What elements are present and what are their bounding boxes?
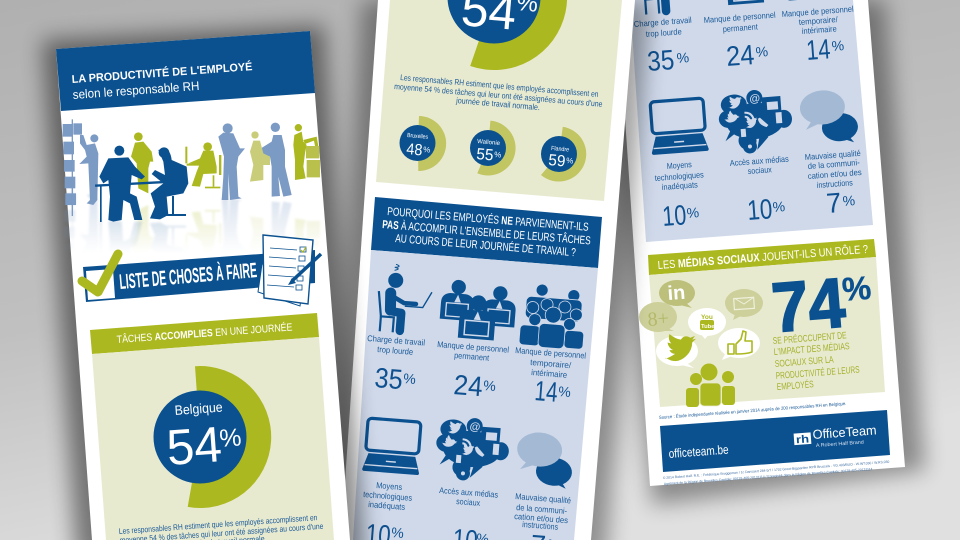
reason percentages: % [686,204,700,221]
heading: why employees cannot finish: AU COURS DE LEUR JOURNÉE DE TRAVAIL ? [395,232,576,259]
panel: reasons [353,250,598,540]
reason labels: intérimaire [801,23,837,36]
reason labels [363,333,587,532]
icon: checklist paper and pen [258,235,321,306]
reason percentages: % [558,383,571,400]
reason labels: sociaux [747,164,773,176]
reason labels: inadéquats [661,179,698,192]
reason percentages: 35 [374,362,404,395]
reason labels: Manque de personnel [437,339,510,355]
chart: Belgium donut 54% [154,366,271,508]
text: 74% description: EMPLOYÉS [776,379,814,393]
text: 74% description: SE PRÉOCCUPENT DE [772,330,847,347]
reason labels: Manque de personnel [703,10,776,25]
reason percentages: % [483,377,496,394]
reason percentages: % [772,198,786,215]
header banner: title [56,31,315,111]
chart: Flandre 59% [541,127,586,182]
icon: YouTube bubble [688,308,726,339]
icon: social media cloud [717,87,794,156]
floor reflection [64,188,320,246]
reason labels: de la communi- [516,502,568,516]
text: description [119,513,324,540]
heading: why employees cannot finish [371,197,602,268]
reason percentages: 10 [746,193,773,226]
reason labels: Moyens [376,480,403,492]
icon: speech bubbles [799,88,859,146]
icon: laptop [362,418,423,475]
heading: tasks completed in a day [90,313,319,354]
reason percentages: % [403,370,416,387]
icon: Google plus bubble [639,302,677,332]
reason percentages: % [842,192,856,209]
reason labels: cation et/ou des [807,167,862,181]
reason labels: instructions [816,177,853,190]
reason labels: sociaux [456,496,481,508]
icon: people group [686,364,735,407]
icon: workload [637,0,695,15]
reason labels: temporaire/ [798,14,839,27]
legal fine print: Agrément de la Région de Bruxelles-Capitale: 00128-406-20131114 / Enregistré dans la Région de Bruxelles-Capitale: 00128-405-20131114 [664,467,873,486]
reason percentages [365,362,571,540]
icon: temporary staff [782,0,850,2]
icon: like bubble [718,328,760,360]
text: description: moyenne 54 % des tâches qui leur ont été assignées au cours d'une [394,82,603,109]
reason labels: inadéquats [368,499,406,512]
text: 74% description: PRODUCTIVITÉ DE LEURS [775,365,860,382]
reason percentages: 14 [534,375,559,408]
icon: Twitter bubble [656,334,698,368]
icon: mail bubble [725,289,763,320]
reason labels: technologiques [654,169,704,183]
heading: why employees cannot finish: POURQUOI LES EMPLOYÉS NE PARVIENNENT-ILS [387,205,589,234]
reason labels: instructions [522,519,559,532]
big figure 74%: 74 [769,263,848,347]
text: 74% description [772,330,860,393]
reason labels: trop lourde [645,26,682,39]
reason labels: de la communi- [807,157,860,171]
reason labels: permanent [722,21,759,34]
reason labels [633,4,862,192]
panel: third sheet (bottom of infographic) [605,0,925,505]
chart: Belgium donut 54%: 54 [165,416,224,476]
icon: social media cloud [434,415,511,484]
chart: Bruxelles 48%: Bruxelles [407,133,428,141]
reason labels: temporaire/ [530,357,572,370]
icon: laptop [648,98,709,155]
heading: social media role: LES MÉDIAS SOCIAUX JOUENT-ILS UN RÔLE ? [657,243,869,272]
subtitle: selon le responsable RH [72,79,200,102]
chart: Wallonie 55%: Wallonie [477,139,501,147]
reason labels: Mauvaise qualité [515,491,572,505]
reason labels: Mauvaise qualité [804,148,861,162]
chart: Flandre 59%: Flandre [551,146,570,154]
reason percentages: % [676,49,690,66]
reason labels: cation et/ou des [514,511,568,525]
reason percentages: 7 [825,187,842,219]
text: 74% description: SOCIAUX SUR LA [774,354,834,370]
seated foreground figures [95,146,188,222]
reason labels: Charge de travail [367,333,426,348]
title: LA PRODUCTIVITÉ DE L'EMPLOYÉ [71,60,253,86]
reason percentages: % [755,43,769,60]
icon: check mark [82,254,118,292]
panel: second sheet (middle of infographic) [325,0,650,540]
text: description: Les responsables RH estiment que les employés accomplissent en [119,513,318,536]
reason labels: trop lourde [377,344,414,357]
reason labels: technologiques [363,489,412,503]
icon: speech bubbles [514,431,575,489]
logo: OfficeTeam wordmark: OfficeTeam [812,422,877,442]
icon: temporary staff [519,283,587,350]
icon: YouTube bubble: You [701,314,713,321]
icon: LinkedIn bubble: in [667,282,686,305]
chart: Bruxelles 48%: 48 [406,141,423,159]
chart: Bruxelles 48% [400,116,446,171]
sheet shadow [325,0,650,540]
reason percentages [646,33,856,232]
icon: LinkedIn bubble [659,280,695,308]
icon: YouTube bubble: Tube [701,324,715,330]
heading: tasks completed in a day: TÂCHES ACCOMPLIES EN UNE JOURNÉE [116,320,293,346]
footer: OfficeTeam brand [660,410,890,472]
reason percentages: 14 [805,33,831,66]
reason labels: Moyens [666,159,692,171]
icon: Google plus bubble: 8+ [647,308,670,331]
sheet shadow [605,0,925,505]
chart: Wallonie 55% [470,121,516,176]
white checkbox [86,269,115,300]
standing and background figures [63,119,320,216]
reason labels: intérimaire [531,367,568,380]
logo: rh box [794,432,811,447]
chart: Belgium donut 54%: % [218,423,242,453]
banner text: LISTE DE CHOSES À FAIRE [118,259,258,294]
banner: to-do list [82,235,321,306]
icon: permanent staff [438,279,518,342]
panel: social media [639,257,885,407]
reason percentages: 24 [725,39,755,72]
chart: Bruxelles 48%: % [423,145,431,155]
panel: reasons continued [630,0,873,242]
sheet paper [341,0,635,540]
chart: Flandre 59%: % [566,156,574,166]
sheet shadow [42,25,365,540]
text: description: Les responsables RH estiment que les employés accomplissent en [400,73,599,99]
source note: Source : Étude indépendante réalisée en janvier 2014 auprès de 200 responsables RH en Belgique. [659,400,847,420]
chart: Belgium donut 54%: Belgique [174,400,223,418]
logo: tagline: A Robert Half Brand [816,439,864,449]
reason labels: Accès aux médias [439,485,498,500]
reason percentages: 10 [661,199,687,232]
heading: why employees cannot finish: PAS À ACCOMPLIR L'ENSEMBLE DE LEURS TÂCHES [382,218,591,247]
big figure 74%: % [841,269,872,308]
reason percentages: % [831,37,845,54]
panel: first sheet (top of infographic) [42,25,365,540]
reason labels: Charge de travail [633,15,692,29]
logo: rh box: rh [796,433,810,446]
chart: Flandre 59%: 59 [548,152,566,170]
sheet paper [617,0,905,486]
illustration: office silhouettes [62,119,320,246]
icon: workload [376,263,434,335]
reason labels: Manque de personnel [781,4,854,19]
reason labels: Accès aux médias [729,154,789,168]
chart: Wallonie 55%: % [494,150,502,160]
panel: completed tasks continued [376,0,622,201]
chart: Wallonie 55%: 55 [476,146,494,164]
legal fine print: © 2014 Robert Half. R.E. : Frédérique Bruggeman / 1c Dansaert 284-5/7 / 1702 Groot-Bijgaarden RPR Brussels - VG.403/BUO - W.INT.030 / W.RS.030 [663,460,890,480]
chart: Belgium donut 54% [448,0,567,70]
reason labels: permanent [454,350,490,363]
reason percentages: 35 [646,44,675,77]
sheet paper [56,31,350,540]
panel: tasks completed [92,337,334,540]
reason labels: Manque de personnel [515,345,587,361]
text: 74% description: L'IMPACT DES MÉDIAS [773,341,850,358]
text: description: journée de travail normale. [455,96,540,112]
footer url: officeteam.be [668,443,729,461]
icon: permanent staff [704,0,784,7]
reason percentages: 24 [453,369,484,402]
text: description [394,73,603,112]
